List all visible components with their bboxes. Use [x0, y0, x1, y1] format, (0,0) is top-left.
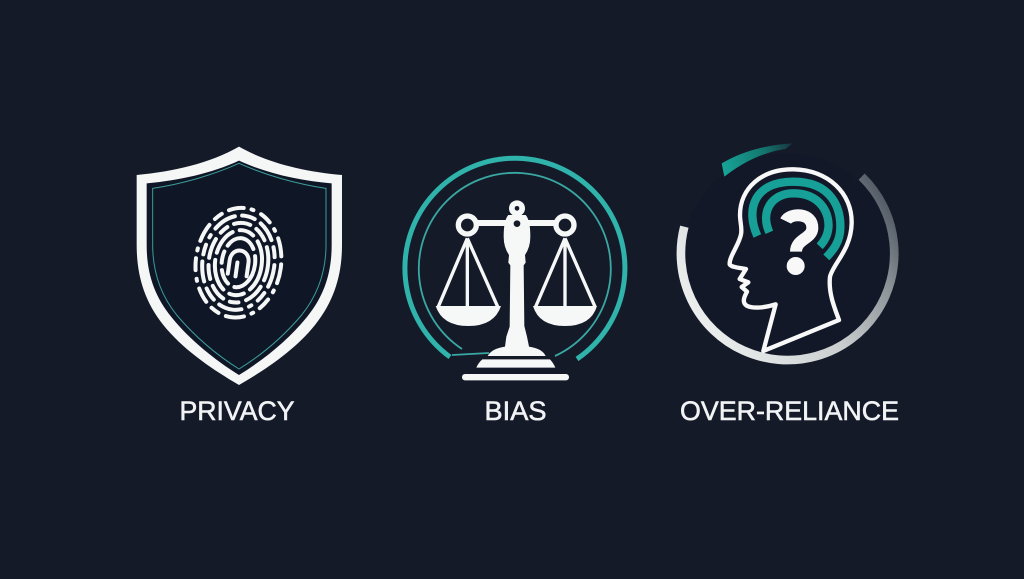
shield outer frame: [137, 147, 342, 385]
icon: scales of justice: [436, 200, 597, 380]
grey ring: [681, 177, 894, 360]
head outline: [730, 169, 852, 351]
right ring: [556, 216, 574, 234]
label: over-reliance: OVER-RELIANCE: [680, 396, 899, 426]
base steps: [476, 359, 555, 368]
icon: shield with fingerprint: [137, 147, 342, 385]
question mark: [786, 215, 812, 252]
top finial: [509, 200, 525, 216]
shield inner panel: [147, 161, 332, 375]
shield teal inline: [153, 163, 326, 369]
column and stand: [488, 215, 546, 356]
label: bias: BIAS: [484, 396, 546, 426]
teal top arc: [722, 143, 792, 177]
left pan: [436, 238, 501, 326]
right pan: [533, 238, 597, 326]
left ring: [458, 216, 476, 234]
teal brain waves: [752, 182, 840, 257]
panel: privacy: [137, 147, 342, 426]
panel: over-reliance: [680, 143, 899, 426]
fingerprint: [189, 202, 288, 323]
icon: head with question mark: [681, 143, 894, 363]
icon: teal arcs: [405, 158, 625, 359]
dark disc: [682, 153, 892, 363]
panel: bias: [405, 158, 625, 426]
beam: [477, 220, 557, 226]
label: privacy: PRIVACY: [180, 396, 294, 426]
